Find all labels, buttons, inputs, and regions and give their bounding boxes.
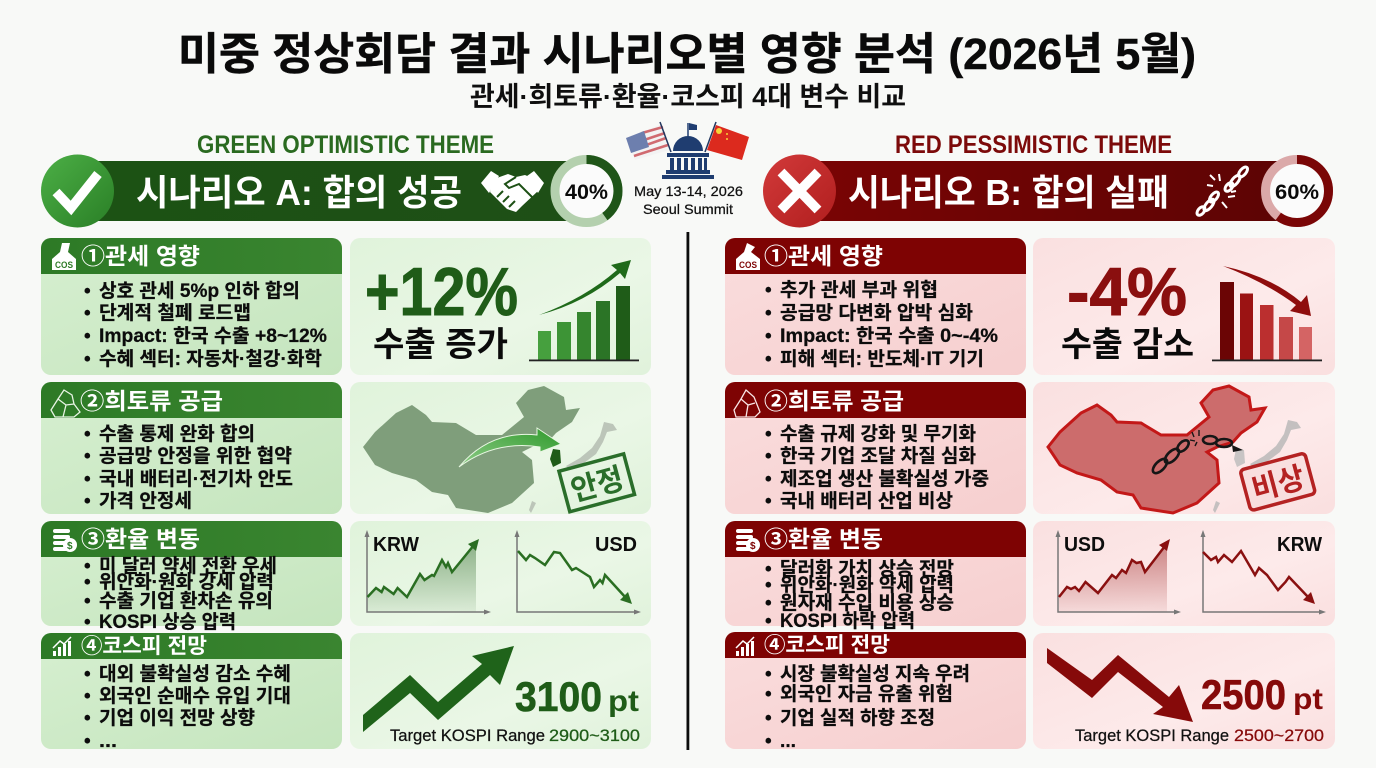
heading: ③환율 변동 xyxy=(764,526,883,552)
bar chart: rising xyxy=(529,260,639,361)
panel: B2 rare earth text xyxy=(725,382,1026,514)
stamp: stable: 안정 xyxy=(568,462,627,508)
stat: +12%: +12% xyxy=(365,254,518,330)
bullet list: • xyxy=(765,303,772,324)
map: Taiwan xyxy=(1213,501,1220,513)
icon: coins xyxy=(736,529,760,552)
bullet list: • xyxy=(765,708,772,729)
arrow: downtrend xyxy=(1047,648,1193,722)
panel: A2 rare earth text xyxy=(41,382,342,514)
icon: handshake xyxy=(481,171,544,212)
bullet list: • xyxy=(765,664,772,685)
bullet list xyxy=(765,663,970,752)
panel: A4 KOSPI target xyxy=(350,633,651,749)
heading: ④코스피 전망 xyxy=(81,635,207,658)
unit: pt xyxy=(608,685,639,718)
bullet list: 국내 배터리·전기차 안도 xyxy=(99,468,293,490)
bullet list: • xyxy=(84,424,91,445)
target label: Target KOSPI Range xyxy=(390,727,545,745)
panel: A3 exchange charts xyxy=(350,521,651,626)
bullet list: • xyxy=(765,593,772,614)
panel: A3 exchange rate text xyxy=(41,521,342,633)
heading: ③환율 변동 xyxy=(81,526,200,552)
bullet list: • xyxy=(765,469,772,490)
donut: 60%: 60% xyxy=(1275,181,1319,204)
label: export increase: 수출 증가 xyxy=(373,326,508,364)
line chart: USD falling: USD xyxy=(595,534,637,556)
bullet list: 제조업 생산 불확실성 가중 xyxy=(780,468,989,490)
bullet list: • xyxy=(765,731,772,752)
heading: ①관세 영향 xyxy=(81,243,200,269)
bullet list: 가격 안정세 xyxy=(99,490,192,512)
panel: B3 exchange rate text xyxy=(725,521,1026,632)
target range: 2900~3100 xyxy=(549,727,640,745)
bullet list xyxy=(765,423,989,512)
map: Taiwan xyxy=(529,501,536,513)
bullet list: • xyxy=(765,349,772,370)
bullet list: • xyxy=(84,731,91,752)
bullet list: • xyxy=(765,326,772,347)
icon: rare earth ore xyxy=(734,390,760,417)
heading: ②희토류 공급 xyxy=(764,388,904,414)
heading: ②희토류 공급 xyxy=(80,388,223,414)
panel: B1 tariff text xyxy=(725,238,1026,375)
bullet list: 수출 규제 강화 및 무기화 xyxy=(780,423,976,445)
bullet list: • xyxy=(84,664,91,685)
stat: -4%: -4% xyxy=(1067,254,1187,330)
arrow: supply to Korea xyxy=(459,428,561,467)
heading: ④코스피 전망 xyxy=(764,634,890,657)
banner: scenario B xyxy=(763,154,1328,228)
bullet list xyxy=(84,280,327,370)
icon: growth chart xyxy=(736,637,754,656)
bullet list: 기업 실적 하향 조정 xyxy=(780,707,935,729)
bullet list: 위안화·원화 강세 압력 xyxy=(99,571,274,593)
bullet list: 기업 이익 전망 상향 xyxy=(99,707,255,729)
bullet list: 수출 통제 완화 합의 xyxy=(99,423,255,445)
bullet list: 미 달러 약세 전환 우세 xyxy=(99,555,277,577)
icon: check circle xyxy=(41,154,114,228)
panel: A2 map xyxy=(350,382,651,514)
icon: coins xyxy=(53,529,77,552)
icon: rare earth ore xyxy=(51,390,80,417)
bullet list: • xyxy=(84,572,91,593)
bullet list: 한국 기업 조달 차질 심화 xyxy=(780,445,976,467)
bullet list: 국내 배터리 산업 비상 xyxy=(780,490,953,512)
bullet list xyxy=(84,663,291,752)
panel: A1 tariff text xyxy=(41,238,342,375)
target range: 2500~2700 xyxy=(1234,727,1324,745)
panel: B3 exchange charts xyxy=(1033,521,1335,626)
line chart: KRW falling: KRW xyxy=(1277,534,1322,556)
bullet list: 대외 불확실성 감소 수혜 xyxy=(99,663,291,685)
bullet list: • xyxy=(84,303,91,324)
bullet list: 위안화·원화 약세 압력 xyxy=(780,574,954,596)
stamp: stable xyxy=(559,454,635,512)
bullet list: 수혜 섹터: 자동차·철강·화학 xyxy=(99,348,322,370)
label: export decrease: 수출 감소 xyxy=(1061,326,1194,364)
heading: ①관세 영향 xyxy=(764,243,883,269)
panel: B1 export decline xyxy=(1033,238,1335,375)
bullet list: • xyxy=(84,591,91,612)
panel: B2 map xyxy=(1033,382,1335,514)
summit date: May 13-14, 2026 xyxy=(634,183,743,199)
icon: money bag: COS xyxy=(55,260,73,270)
bullet list: • xyxy=(84,556,91,577)
banner: scenario A xyxy=(41,154,618,228)
bullet list: Impact: 한국 수출 +8~12% xyxy=(99,325,327,347)
bullet list: 시장 불확실성 지속 우려 xyxy=(780,663,970,685)
bullet list: 외국인 자금 유출 위험 xyxy=(780,683,953,705)
icon: X circle xyxy=(763,154,836,228)
bullet list: • xyxy=(765,559,772,580)
bullet list: • xyxy=(765,280,772,301)
bullet list: • xyxy=(765,491,772,512)
map: Korea xyxy=(1234,449,1245,467)
bullet list: • xyxy=(765,575,772,596)
bullet list: ... xyxy=(99,731,117,752)
icon: coins: $ xyxy=(67,541,73,552)
donut: 60% xyxy=(1266,160,1328,222)
summit emblem: flags and capitol xyxy=(626,122,749,217)
bullet list: • xyxy=(84,326,91,347)
stat: 2500 pt: 2500 xyxy=(1201,671,1286,718)
unit: pt xyxy=(1293,683,1323,716)
panel: A4 KOSPI text xyxy=(41,633,342,752)
scenario A title: 시나리오 A: 합의 성공 xyxy=(136,172,462,213)
bullet list: • xyxy=(84,469,91,490)
icon: US flag xyxy=(626,122,671,160)
icon: broken chain xyxy=(1150,430,1243,476)
stamp: emergency xyxy=(1240,453,1316,511)
bullet list: • xyxy=(765,446,772,467)
line chart: USD rising xyxy=(1056,530,1181,614)
bullet list: • xyxy=(84,491,91,512)
arrow: uptrend xyxy=(363,646,514,732)
bullet list: 추가 관세 부과 위협 xyxy=(780,279,938,301)
bullet list xyxy=(765,279,998,370)
bullet list: 상호 관세 5%p 인하 합의 xyxy=(99,280,300,302)
bullet list: 원자재 수입 비용 상승 xyxy=(780,592,954,614)
bullet list: KOSPI 상승 압력 xyxy=(99,611,236,633)
subtitle: 관세·희토류·환율·코스피 4대 변수 비교 xyxy=(470,82,906,112)
heading: red pessimistic theme: RED PESSIMISTIC THEME xyxy=(895,131,1172,159)
bullet list: 공급망 다변화 압박 심화 xyxy=(780,302,973,324)
bullet list xyxy=(84,423,293,512)
panel: A1 export growth xyxy=(350,238,651,375)
target label: Target KOSPI Range xyxy=(1075,727,1229,745)
icon: growth chart xyxy=(53,637,71,656)
bullet list: • xyxy=(84,349,91,370)
bullet list: ... xyxy=(780,731,796,752)
title: 미중 정상회담 결과 시나리오별 영향 분석 (2026년 5월) xyxy=(178,30,1196,79)
bullet list: 단계적 철폐 로드맵 xyxy=(99,302,251,324)
bullet list: Impact: 한국 수출 0~-4% xyxy=(780,325,998,347)
line chart: KRW falling xyxy=(1200,530,1326,614)
panel: B4 KOSPI text xyxy=(725,632,1026,752)
map: Japan xyxy=(566,422,617,470)
stat: 3100 pt: 3100 xyxy=(515,673,602,720)
heading: green optimistic theme: GREEN OPTIMISTIC THEME xyxy=(197,131,494,159)
icon: money bag: COS xyxy=(739,260,757,270)
line chart: USD falling xyxy=(514,530,641,614)
donut: 40%: 40% xyxy=(565,181,608,204)
icon: coins: $ xyxy=(750,541,756,552)
bullet list: • xyxy=(84,446,91,467)
bullet list: • xyxy=(765,611,772,632)
bullet list: • xyxy=(84,612,91,633)
bullet list: • xyxy=(765,684,772,705)
bullet list: 외국인 순매수 유입 기대 xyxy=(99,685,291,707)
icon: money bag xyxy=(736,243,760,270)
icon: capitol xyxy=(662,123,714,179)
line chart: KRW rising: KRW xyxy=(373,534,419,556)
bullet list: • xyxy=(84,686,91,707)
bullet list: 수출 기업 환차손 유의 xyxy=(99,590,273,612)
bullet list: 달러화 가치 상승 전망 xyxy=(780,558,954,580)
map: Japan xyxy=(1250,420,1301,468)
icon: China flag xyxy=(705,122,749,160)
bar chart: falling xyxy=(1212,266,1322,361)
center divider xyxy=(686,232,689,750)
bullet list: • xyxy=(84,281,91,302)
map: China xyxy=(1048,386,1265,513)
summit location: Seoul Summit xyxy=(643,201,733,217)
map: China xyxy=(363,386,580,513)
bullet list: 공급망 안정을 위한 협약 xyxy=(99,445,292,467)
bullet list: 피해 섹터: 반도체·IT 기기 xyxy=(780,348,984,370)
bullet list: KOSPI 하락 압력 xyxy=(780,610,915,632)
scenario B title: 시나리오 B: 합의 실패 xyxy=(848,172,1169,213)
icon: broken chain xyxy=(1195,165,1249,217)
panel: B4 KOSPI target xyxy=(1033,633,1335,749)
bullet list xyxy=(84,555,277,633)
bullet list xyxy=(765,558,954,632)
map: Korea xyxy=(550,449,561,467)
bullet list: • xyxy=(765,424,772,445)
icon: money bag xyxy=(52,243,76,270)
donut: 40% xyxy=(555,160,618,222)
stamp: emergency: 비상 xyxy=(1249,461,1308,507)
line chart: USD rising: USD xyxy=(1064,534,1105,556)
bullet list: • xyxy=(84,708,91,729)
line chart: KRW rising xyxy=(364,530,491,614)
